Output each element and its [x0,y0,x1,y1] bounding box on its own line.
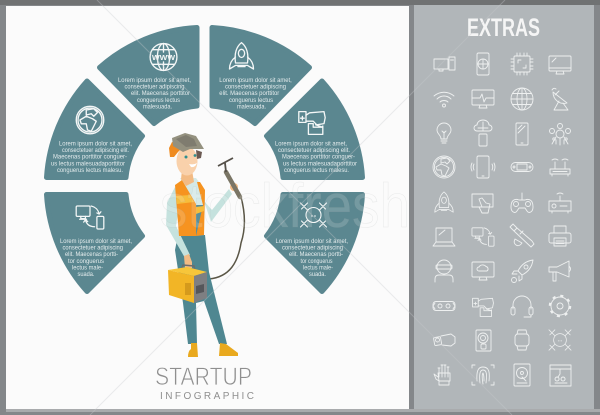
icon: gear [550,296,570,316]
text block: malesuada. [143,104,172,110]
icon: hand watch [433,334,455,346]
text block: Maecenas porttitor conguer- [282,154,355,161]
icon: tablet fingerprint [476,330,491,351]
heading: extras: EXTRAS [467,14,540,42]
icon: cloud monitor [472,262,494,280]
panel: extras background [414,5,594,409]
shirt [180,178,205,205]
subheading: infographic: INFOGRAPHIC [160,391,254,402]
legs and overalls [175,235,227,344]
text block [60,238,132,278]
icon: computer [434,57,455,71]
icon: rocket [435,192,453,212]
text block: conguerus lectus malesu. [284,167,349,174]
icon: phone [516,123,528,145]
figure: welder [166,133,244,357]
text block: Lorem ipsum dolor sit amet, [118,77,191,84]
icon: vr goggles [433,302,455,310]
icon: receiver box [549,193,571,213]
icon: robot glove [434,365,450,385]
segment: lower left devices [46,194,142,292]
text block: suada. [78,271,95,278]
icon: handheld console [511,162,533,172]
icon: smartwatch [515,330,529,350]
text block: elit. Maecenas porttitor [219,90,280,97]
icon: www globe: WWW [152,53,176,62]
icon: earth [433,156,455,178]
icon: vibrating phone [471,156,495,178]
right arm [204,189,232,222]
icon: monitor [549,56,571,74]
text block: consectetuer adipiscing [282,245,343,252]
icon: printer [549,226,571,246]
icon: headphones [511,296,533,317]
text block: consectetuer adipiscing [225,84,286,91]
welding machine [181,265,195,271]
icon: phone globe [477,53,489,75]
icon: gamepad [511,193,533,212]
text block: consectetuer adipiscing [124,84,185,91]
icon grid: extras [433,53,571,386]
icon: tablet touch [472,194,493,213]
text block: lectus male- [303,264,333,271]
icon: satellite dish [552,88,568,110]
boots [188,343,198,357]
icon: hand with watch [299,112,325,134]
text block: consectetuer adipiscing elit. [62,147,129,154]
icon: drone [549,330,571,350]
icon: hard drive [514,364,530,386]
watermark text: stockfresh [160,172,410,241]
text block: conguerus lectus [229,97,274,104]
text block: lectus male- [72,264,103,271]
text block: Lorem ipsum dolor sit amet, [60,238,132,245]
icon: megaphone [549,261,570,281]
segment: top right rocket [212,28,310,124]
text block: Lorem ipsum dolor sit amet, [59,140,132,148]
hard hat [169,142,184,157]
text block: elit. Maecenas portti- [289,251,343,258]
hands [184,254,192,268]
icon: 3d printer [550,365,571,386]
icon: devices sync [472,228,494,246]
icon: network [550,124,570,145]
icon: drone [300,203,326,227]
segment: left earth [46,81,142,178]
text block: us lectus malesuadaporttitor [283,160,358,167]
icon: hand with watch [473,298,493,316]
segment: right hand [266,81,362,178]
welding hose [209,197,244,279]
icon: fingerprint [472,365,494,385]
icon: pulse monitor [472,90,494,108]
text block: tor conguerus [68,258,105,265]
text block: malesuada. [237,104,266,110]
text block: suada. [309,271,326,278]
text block: elit. Maecenas portti- [65,251,118,258]
text block [275,140,358,174]
icon: devices sync [76,206,104,229]
segment: top left www [100,28,197,124]
segment: lower right drone [266,194,362,292]
text block: Maecenas porttitor conguer- [53,154,127,161]
text block: Lorem ipsum dolor sit amet, [219,77,292,84]
text block: consectetuer adipiscing [62,245,123,252]
text block: elit. Maecenas porttitor [131,90,191,97]
icon: globe [511,88,533,110]
neck [181,170,194,186]
panel: white infographic area [6,6,409,409]
text block: us lectus malesuadaporttitor [51,160,126,167]
icon: satellite [510,224,534,247]
icon: chip [511,53,533,75]
text block: consectetuer adipiscing elit. [278,147,350,154]
icon: router [550,159,570,176]
welding visor [172,133,204,152]
left arm [166,187,190,258]
icon: cloud phone [474,120,492,146]
text block: Lorem ipsum dolor sit amet, [275,140,347,148]
text block: Lorem ipsum dolor sit amet, [276,238,348,245]
text block [276,238,348,278]
text block [219,77,292,110]
icon: rocket [230,43,254,69]
text block: conguerus lectus malesu. [57,167,123,174]
icon: earth [76,106,104,134]
icon: light bulb [437,123,451,143]
head [176,146,198,176]
text block: conguerus lectus [137,97,181,104]
heading: startup: STARTUP [155,363,252,391]
icon: laptop [433,228,455,246]
welding torch [226,172,240,197]
watermark diagonal lines [90,0,512,415]
text block: tor conguerus [300,258,333,265]
text block [51,140,132,174]
vest [175,180,205,236]
icon: launching rocket [512,260,533,282]
icon: vr person [435,260,453,282]
face details [184,156,188,158]
icon: wifi [434,92,454,107]
text block [118,77,191,110]
